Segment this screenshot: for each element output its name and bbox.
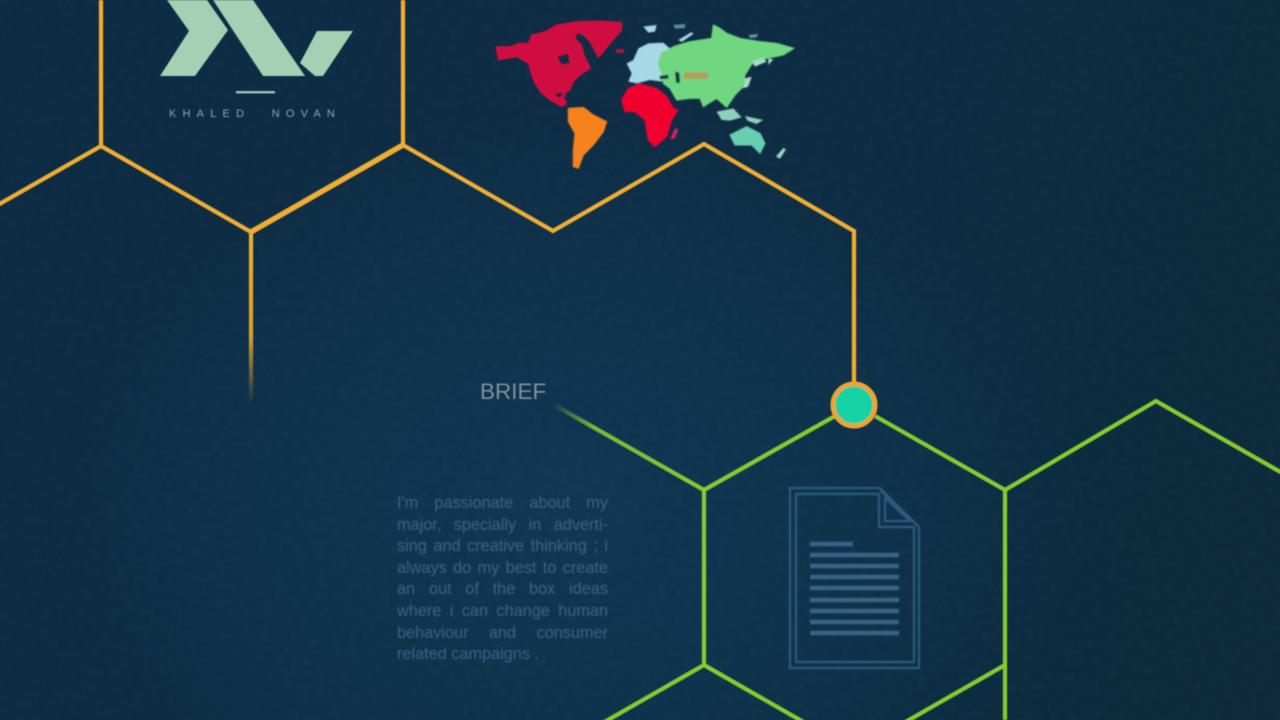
brief paragraph: related campaigns .	[397, 645, 539, 663]
heading: brief: BRIEF	[480, 379, 546, 404]
brief paragraph: an out of the box ideas	[397, 580, 608, 598]
Africa	[622, 84, 678, 147]
brief paragraph: I'm passionate about my	[397, 494, 608, 512]
South America	[568, 107, 607, 168]
New Zealand	[776, 148, 786, 159]
document icon	[790, 488, 919, 668]
South-East Asia islands	[717, 108, 763, 124]
green hexagon line network	[556, 401, 1280, 720]
logo underline	[236, 91, 275, 93]
Far-East coast islands	[743, 57, 773, 88]
brief paragraph: sing and creative thinking ; i	[397, 537, 608, 555]
Asia	[658, 25, 794, 107]
logo mark	[160, 0, 353, 76]
node: orange ring with teal centre	[833, 384, 875, 426]
brief paragraph: behaviour and consumer	[397, 624, 608, 642]
brief paragraph: always do my best to create	[397, 559, 608, 577]
logo name: KHALED NOVAN	[169, 108, 341, 120]
brief paragraph: where i can change human	[397, 602, 608, 620]
world map	[496, 21, 794, 168]
document text lines	[810, 544, 899, 633]
North America and Greenland	[496, 21, 622, 107]
brief paragraph	[396, 494, 608, 663]
orange hexagon line network	[0, 0, 854, 404]
brief paragraph: major, specially in adverti-	[397, 516, 608, 534]
small orange label on map	[684, 72, 708, 79]
Europe and arctic islands	[627, 24, 758, 83]
Iceland	[616, 49, 624, 53]
Australia	[730, 127, 765, 153]
Caspian and Black Sea gaps	[659, 72, 680, 83]
